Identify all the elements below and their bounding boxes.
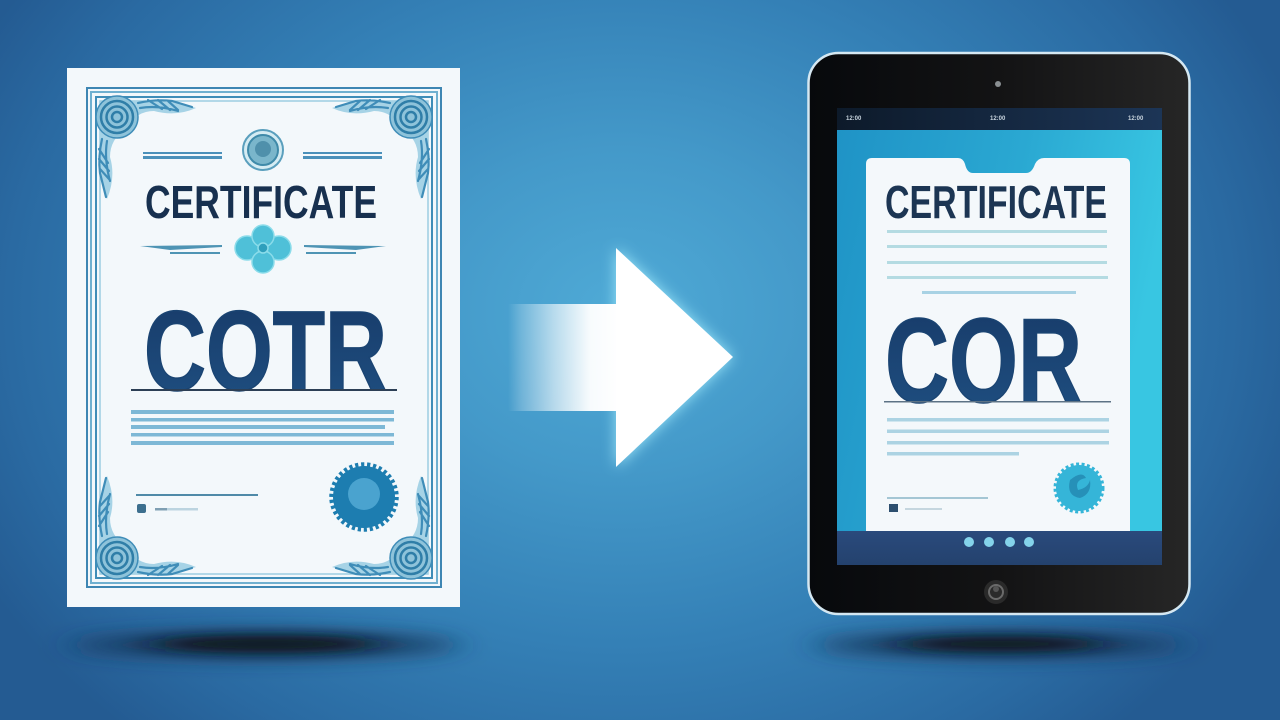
heading: certificate: CERTIFICATE <box>145 176 377 228</box>
top emblem <box>243 130 283 170</box>
status bar: 12:00 <box>1128 116 1144 122</box>
signature icon and caption <box>889 504 942 512</box>
signature line <box>887 497 988 499</box>
arrow shaft <box>508 304 622 411</box>
arrow glow <box>616 248 733 467</box>
signature icon and caption <box>137 504 198 513</box>
arrow head <box>616 248 733 467</box>
screen background <box>837 130 1162 531</box>
panel: tablet <box>808 53 1190 614</box>
body lines <box>887 418 1109 456</box>
underline <box>884 401 1111 402</box>
on-screen certificate <box>866 158 1130 531</box>
underline <box>131 389 397 391</box>
bottom navigation bar <box>837 531 1162 565</box>
top rules <box>143 152 382 159</box>
tablet body <box>808 53 1190 614</box>
body text lines <box>131 410 394 445</box>
seal <box>1055 464 1103 512</box>
text lines <box>887 230 1108 294</box>
seal <box>332 464 396 530</box>
status bar: 12:00 <box>990 116 1006 122</box>
arrow: transition to digital <box>508 248 733 467</box>
home button <box>984 580 1008 604</box>
ornamental border <box>87 88 441 587</box>
shadow under certificate <box>70 630 460 660</box>
flourish rules <box>140 245 386 254</box>
shadow under tablet <box>815 631 1185 659</box>
certificate sheet <box>67 68 460 607</box>
big code: COTR: COTR <box>144 288 387 414</box>
signature line <box>136 494 258 496</box>
camera <box>995 81 1001 87</box>
status bar <box>837 108 1162 130</box>
heading: certificate: CERTIFICATE <box>885 176 1107 228</box>
panel: paper certificate <box>67 68 460 607</box>
flower ornament <box>235 225 291 273</box>
status bar: 12:00 <box>846 116 862 122</box>
document card <box>866 158 1130 531</box>
big code: COR: COR <box>885 294 1082 428</box>
